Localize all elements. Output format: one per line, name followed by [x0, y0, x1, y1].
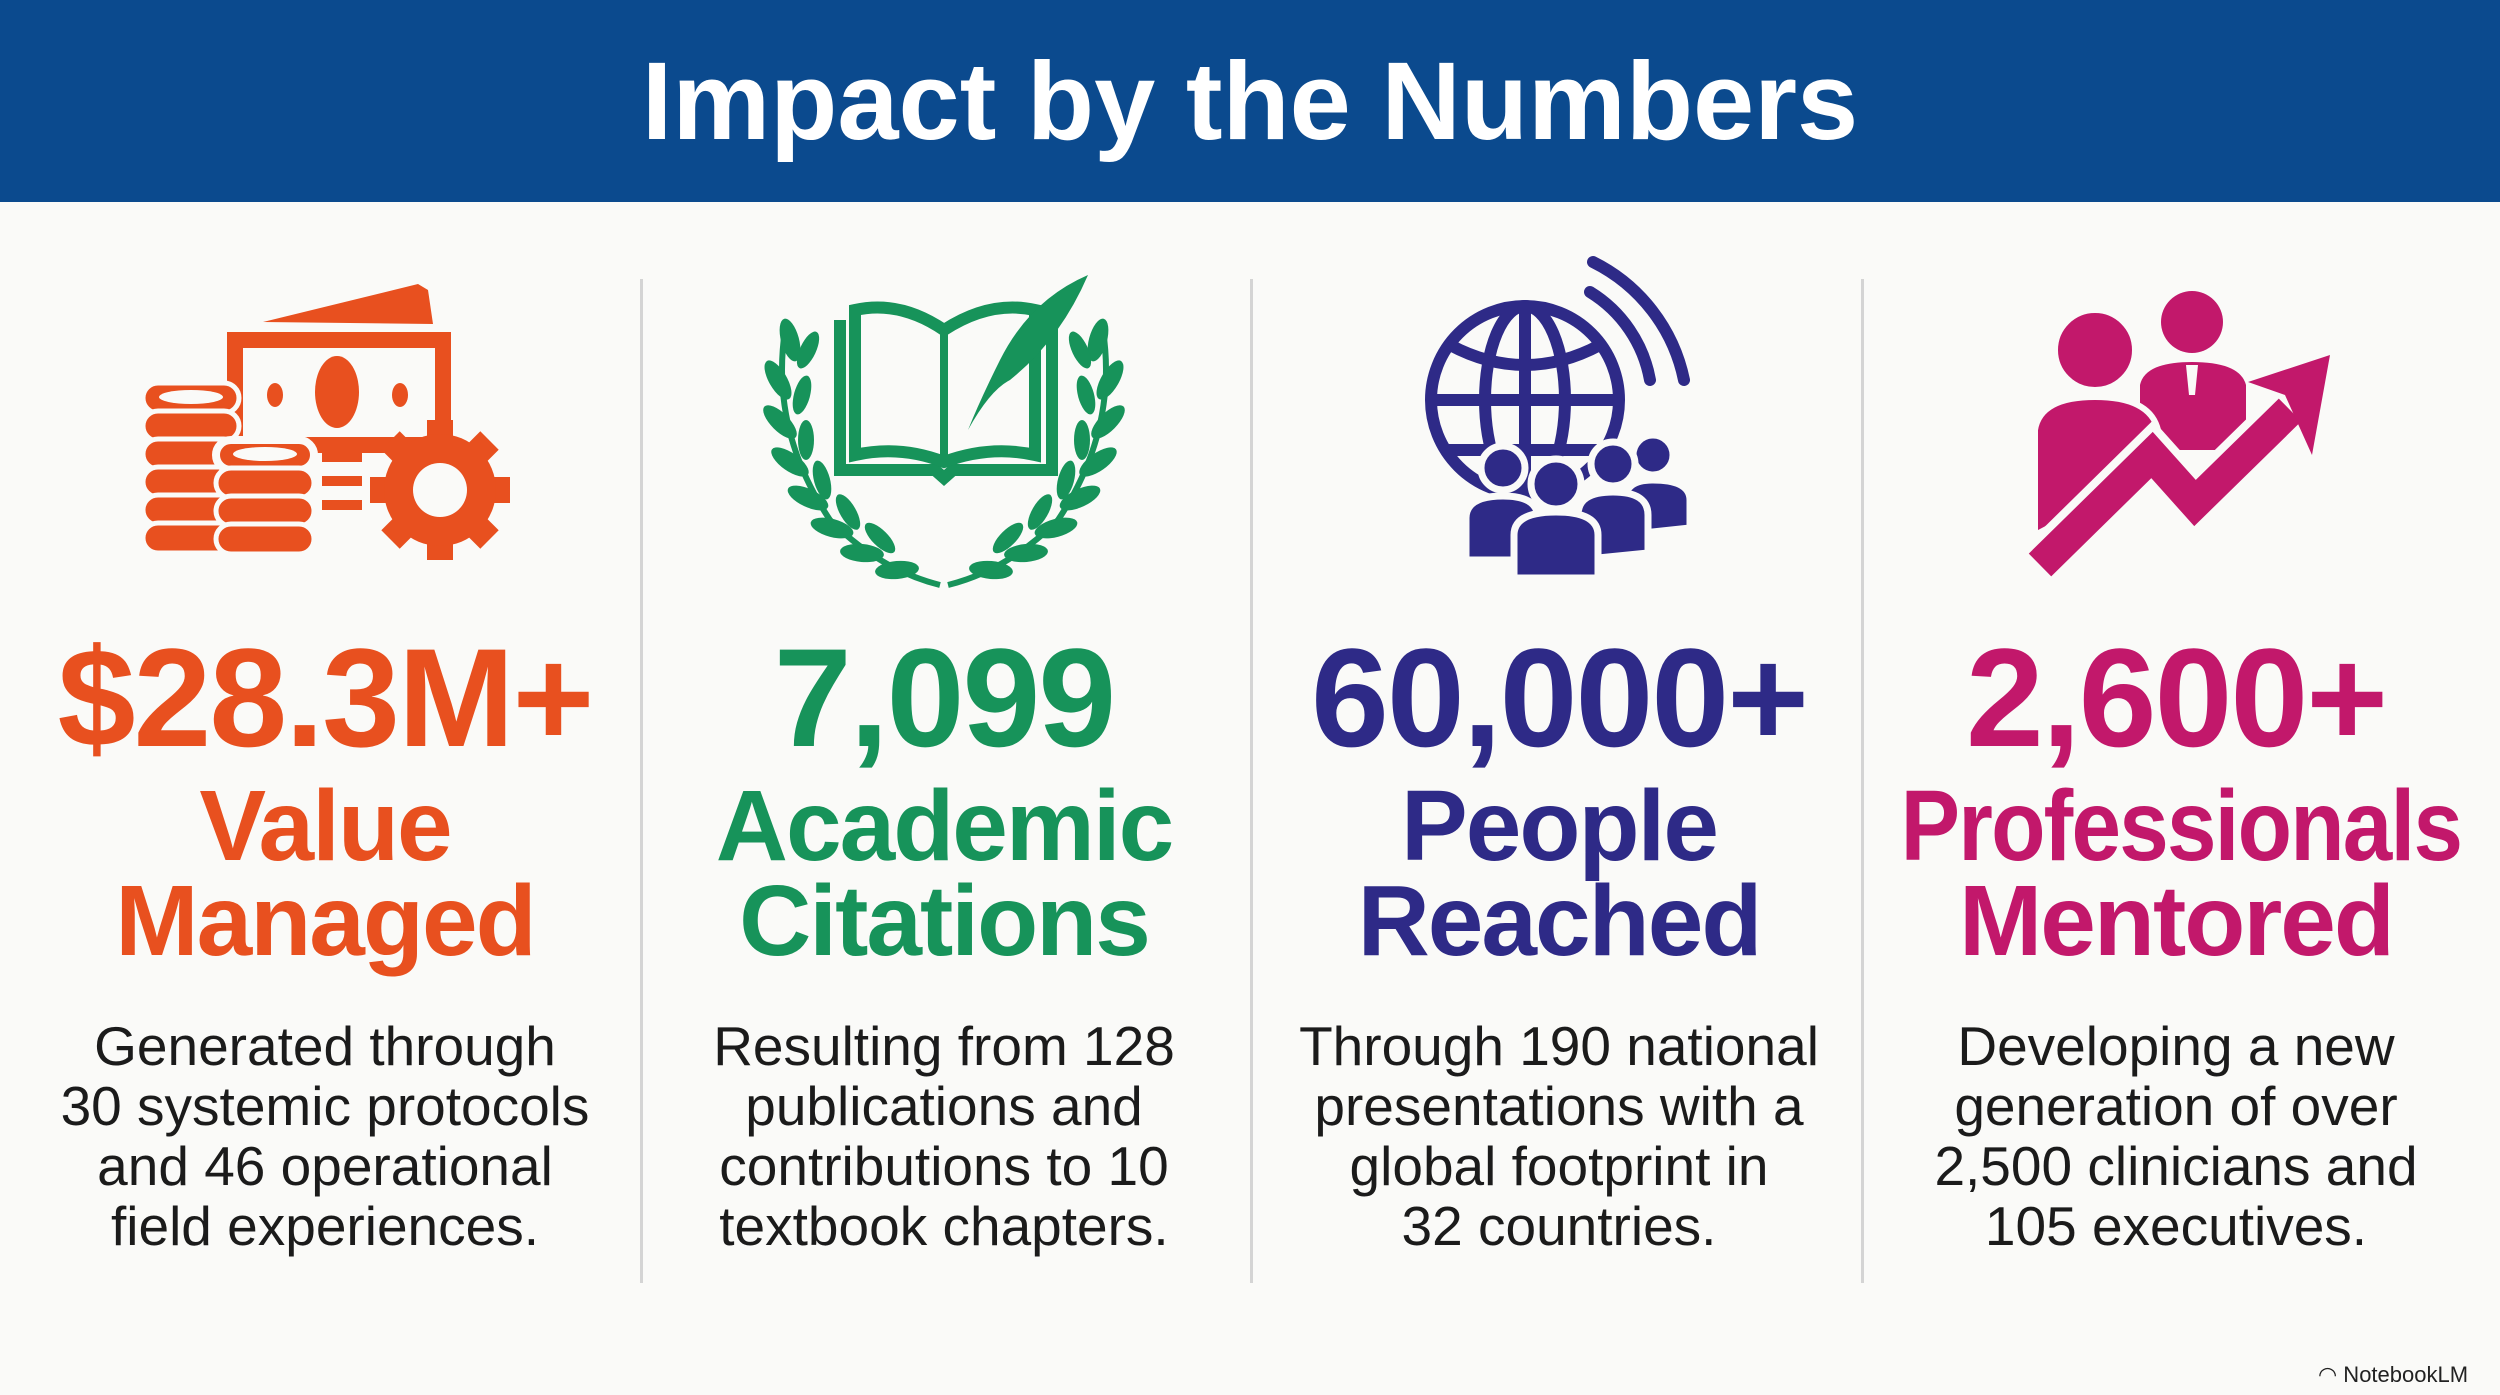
header bar [0, 0, 2500, 202]
number: 2,600+: 2,600+ [1966, 619, 2386, 776]
text: description: 32 countries. [1402, 1195, 1716, 1257]
label: Academic Citations [716, 770, 1172, 977]
text: description: Resulting from 128 [713, 1015, 1175, 1077]
number: 60,000+: 60,000+ [1311, 619, 1807, 776]
panel: academic citations [713, 619, 1175, 1257]
label: Professionals Mentored: Professionals [1901, 770, 2461, 882]
panel: professionals mentored [1901, 619, 2461, 1257]
label: Value Managed [115, 770, 535, 977]
text: description: Through 190 national [1299, 1015, 1819, 1077]
text: description: 30 systemic protocols [61, 1075, 589, 1137]
text: description: generation of over [1954, 1075, 2398, 1137]
number: 7,099: 7,099 [774, 619, 1114, 776]
text: description [713, 1015, 1175, 1257]
text: description: global footprint in [1350, 1135, 1768, 1197]
number: $28.3M+: $28.3M+ [58, 619, 592, 776]
text: description [1934, 1015, 2418, 1257]
text: description: 105 executives. [1985, 1195, 2367, 1257]
text: description [1299, 1015, 1819, 1257]
title: Impact by the Numbers [642, 40, 1858, 163]
label: Value Managed: Managed [115, 865, 535, 977]
text: description: textbook chapters. [719, 1195, 1169, 1257]
label: Academic Citations: Academic [716, 770, 1172, 882]
text: description: presentations with a [1314, 1075, 1804, 1137]
label: Professionals Mentored [1901, 770, 2461, 977]
label: People Reached: Reached [1358, 865, 1760, 977]
text: description: and 46 operational [97, 1135, 553, 1197]
text: description: 2,500 clinicians and [1934, 1135, 2418, 1197]
text: description: field experiences. [111, 1195, 539, 1257]
label: People Reached: People [1401, 770, 1717, 882]
text: description [61, 1015, 589, 1257]
label: Academic Citations: Citations [739, 865, 1149, 977]
label: Value Managed: Value [199, 770, 451, 882]
label: People Reached [1358, 770, 1760, 977]
text: description: contributions to 10 [719, 1135, 1169, 1197]
footer: NotebookLM mark: ◠ NotebookLM [2318, 1362, 2468, 1387]
text: description: Generated through [94, 1015, 556, 1077]
text: description: publications and [745, 1075, 1143, 1137]
label: Professionals Mentored: Mentored [1959, 865, 2393, 977]
text: description: Developing a new [1957, 1015, 2395, 1077]
panel: value managed [58, 619, 592, 1257]
panel: people reached [1299, 619, 1819, 1257]
